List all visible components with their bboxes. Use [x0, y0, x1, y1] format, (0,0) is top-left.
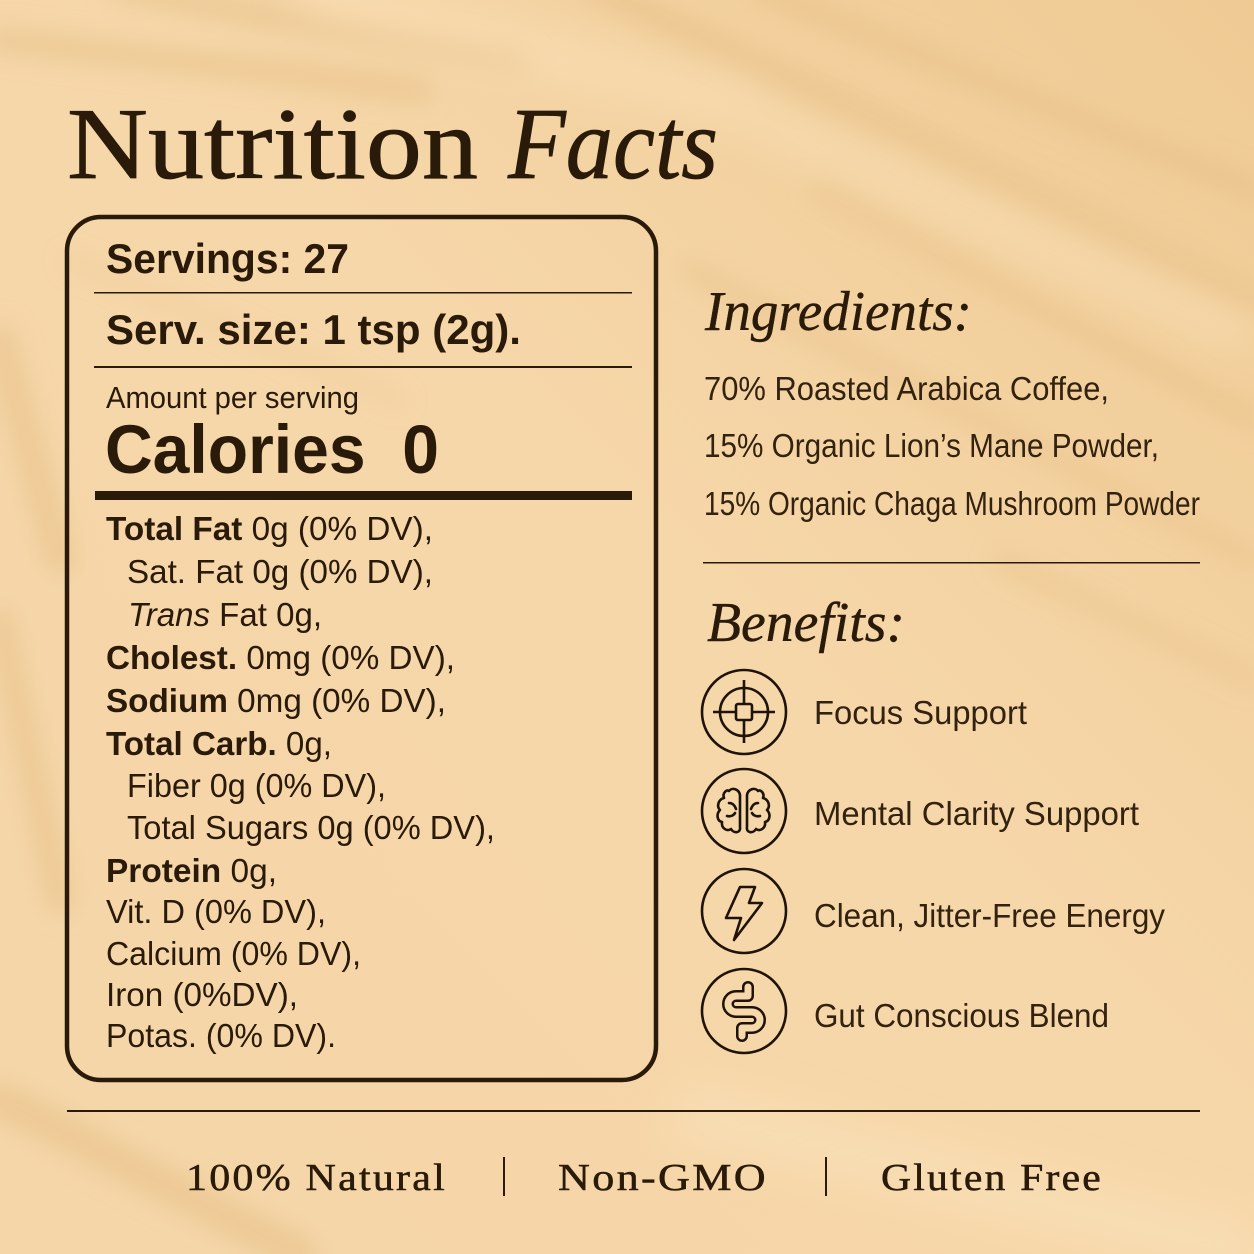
title: Facts: [507, 88, 718, 201]
ingredients heading: Ingredients:: [704, 281, 972, 343]
nutrient list: Protein 0g,: [106, 852, 277, 889]
icon: target: [702, 670, 786, 754]
amount per serving: Amount per serving: [106, 380, 359, 415]
nutrient list: Cholest. 0mg (0% DV),: [106, 639, 455, 676]
icon: intestine: [702, 969, 786, 1053]
nutrient list: Sodium 0mg (0% DV),: [106, 682, 446, 719]
benefit: clean energy: [702, 869, 1165, 953]
footer claims: Gluten Free: [881, 1157, 1103, 1199]
nutrient list: Potas. (0% DV).: [106, 1017, 336, 1054]
icon: lightning bolt: [702, 869, 786, 953]
benefits heading: Benefits:: [707, 592, 905, 654]
benefit: mental clarity: [702, 769, 1139, 853]
panel: nutrition label: [67, 217, 656, 1080]
nutrient list: [106, 510, 495, 1054]
footer claims: 100% Natural: [186, 1157, 447, 1199]
nutrient list: Total Fat 0g (0% DV),: [106, 510, 433, 547]
nutrient list: Total Carb. 0g,: [106, 725, 332, 762]
nutrient list: Trans Fat 0g,: [128, 596, 322, 633]
ingredients list: [704, 370, 1200, 522]
nutrient list: Sat. Fat 0g (0% DV),: [127, 553, 433, 590]
calories: Calories 0: [105, 411, 439, 488]
panel outline: [67, 217, 656, 1080]
benefit: focus support: Focus Support: [814, 694, 1027, 731]
nutrient list: Fiber 0g (0% DV),: [127, 767, 386, 804]
benefit: gut conscious: [702, 969, 1109, 1053]
benefit: focus support: [702, 670, 1027, 754]
benefit: gut conscious: Gut Conscious Blend: [814, 997, 1109, 1034]
nutrient list: Iron (0%DV),: [106, 976, 298, 1013]
ingredients list: 15% Organic Lion’s Mane Powder,: [704, 427, 1159, 464]
icon: brain: [702, 769, 786, 853]
title: [67, 88, 718, 201]
benefit: clean energy: Clean, Jitter-Free Energy: [814, 897, 1165, 934]
nutrient list: Vit. D (0% DV),: [106, 893, 326, 930]
ingredients list: 70% Roasted Arabica Coffee,: [704, 370, 1109, 407]
nutrient list: Calcium (0% DV),: [106, 935, 361, 972]
servings: Servings: 27: [106, 235, 349, 282]
nutrient list: Total Sugars 0g (0% DV),: [127, 809, 495, 846]
serving size: Serv. size: 1 tsp (2g).: [106, 306, 521, 353]
footer claims: [186, 1157, 1103, 1199]
title: Nutrition: [67, 88, 478, 201]
benefit: mental clarity: Mental Clarity Support: [814, 795, 1139, 832]
footer claims: Non-GMO: [558, 1157, 768, 1199]
